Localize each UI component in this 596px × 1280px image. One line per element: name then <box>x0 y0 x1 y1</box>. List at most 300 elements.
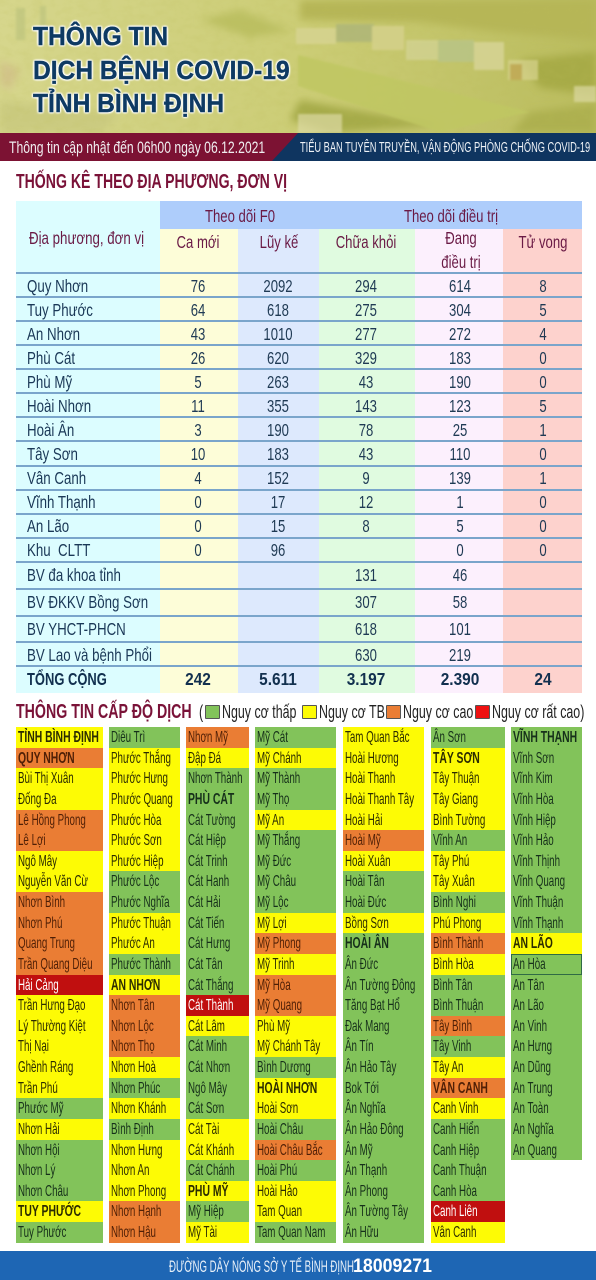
risk list column 6: Tây Vinh <box>433 1038 471 1055</box>
row: An Nhơn <box>27 324 547 344</box>
row: BV ĐKKV Bồng Sơn: 58 <box>453 592 467 612</box>
risk list column 7: VĨNH THẠNH <box>513 729 577 746</box>
row: totals: TỔNG CỘNG <box>27 669 107 689</box>
row: An Lão: 5 <box>456 516 464 536</box>
risk list column 6: TÂY SƠN <box>433 750 480 767</box>
risk list column 5: Ân Đức <box>345 956 378 973</box>
risk list column 5: Ân Nghĩa <box>345 1100 386 1117</box>
risk list column 3: Ngô Mây <box>188 1080 227 1097</box>
risk list column 4: Mỹ Thành <box>257 770 300 787</box>
row: Vân Canh: 9 <box>362 468 370 488</box>
risk list column 6: Tây Thuận <box>433 770 479 787</box>
row: Tây Sơn: 10 <box>191 444 205 464</box>
update date text: Thông tin cập nhật đến 06h00 ngày 06.12.2021 <box>9 138 265 157</box>
row: Khu CLTT: 96 <box>271 540 285 560</box>
risk list column 4: Mỹ Chánh Tây <box>257 1038 320 1055</box>
risk list column 2: Nhơn Hậu <box>111 1224 156 1241</box>
risk list column 5: Ân Mỹ <box>345 1142 373 1158</box>
statistics table <box>16 201 582 693</box>
risk list column 7: Vĩnh Hảo <box>513 832 554 849</box>
risk list column 4: Mỹ Quang <box>257 997 302 1014</box>
risk list column 4: Mỹ Chánh <box>257 750 301 767</box>
risk list column 6: Tây Giang <box>433 791 478 808</box>
title: THÔNG TIN <box>33 21 168 51</box>
row: Vân Canh: 1 <box>539 468 547 488</box>
table header: Lũy kế <box>260 232 298 252</box>
row: BV Lao và bệnh Phổi <box>27 645 471 665</box>
risk list column 5: Hoài Đức <box>345 894 386 911</box>
table header: Theo dõi điều trị <box>404 206 498 226</box>
risk list column 4: Phù Mỹ <box>257 1018 290 1035</box>
risk list column 4: Mỹ An <box>257 812 284 828</box>
row: BV đa khoa tỉnh <box>27 565 467 585</box>
risk list column 3: Cát Thành <box>188 997 233 1014</box>
update info band <box>0 133 596 161</box>
risk list column 5: Hoài Thanh <box>345 770 395 787</box>
row: BV Lao và bệnh Phổi: 630 <box>355 645 377 665</box>
risk list column 2: Nhơn Tân <box>111 997 155 1014</box>
row: Vĩnh Thạnh: 12 <box>359 492 373 512</box>
row: Tuy Phước: 5 <box>539 300 547 320</box>
risk list column 3: Cát Lâm <box>188 1018 225 1035</box>
risk list column 6: Bình Thành <box>433 935 483 952</box>
row: totals: 2.390 <box>441 669 479 689</box>
risk list column 7: Vĩnh Thạnh <box>513 915 563 932</box>
row: An Nhơn: 1010 <box>263 324 293 344</box>
row: Tây Sơn <box>27 444 547 464</box>
risk list column 3: PHÙ CÁT <box>188 791 234 808</box>
risk list column 3: Cát Tiến <box>188 915 224 932</box>
row: BV đa khoa tỉnh: 46 <box>453 565 467 585</box>
risk list column 7: Vĩnh Kim <box>513 770 553 787</box>
heading: epidemic level: THÔNG TIN CẤP ĐỘ DỊCH <box>16 701 192 723</box>
row: Tuy Phước: 64 <box>191 300 205 320</box>
row: Tây Sơn: Tây Sơn <box>27 444 78 464</box>
risk list column 5: Ân Hảo Đông <box>345 1121 404 1138</box>
risk list column 5: Bok Tới <box>345 1080 379 1097</box>
risk list column 7: An Dũng <box>513 1059 551 1076</box>
risk list column 5: Ân Thạnh <box>345 1162 387 1179</box>
risk list column 5: Hoài Xuân <box>345 853 391 870</box>
risk list column 4: Mỹ Trinh <box>257 956 294 973</box>
risk list column 1: Nhơn Châu <box>18 1183 68 1200</box>
row: Hoài Nhơn: 355 <box>267 396 289 416</box>
row: Hoài Nhơn: 123 <box>449 396 471 416</box>
risk list column 5: Ân Hữu <box>345 1224 379 1241</box>
row: BV YHCT-PHCN <box>27 619 471 639</box>
row: Hoài Nhơn: 5 <box>539 396 547 416</box>
risk list column 7: An Tân <box>513 976 544 994</box>
row: Quy Nhơn: 2092 <box>263 276 293 296</box>
risk list column 6: Bình Nghi <box>433 894 476 911</box>
risk list column 2: Phước Hòa <box>111 812 161 828</box>
row: Quy Nhơn: 8 <box>539 276 547 296</box>
risk list column 7: Vĩnh Hòa <box>513 791 554 808</box>
hotline label: ĐƯỜNG DÂY NÓNG SỞ Y TẾ BÌNH ĐỊNH <box>169 1258 354 1276</box>
row: Vĩnh Thạnh <box>27 492 547 512</box>
risk list column 5: Hoài Thanh Tây <box>345 791 414 808</box>
risk list column 3: Đập Đá <box>188 750 221 767</box>
row: Phù Mỹ <box>27 372 547 392</box>
row: Phù Mỹ: 43 <box>359 372 373 392</box>
risk list column 6: Vĩnh An <box>433 832 467 849</box>
row: BV đa khoa tỉnh: BV đa khoa tỉnh <box>27 565 121 585</box>
row: An Lão: 15 <box>271 516 285 536</box>
row: Tuy Phước: 618 <box>267 300 289 320</box>
row: Tuy Phước <box>27 300 547 320</box>
risk list column 7: An Hòa <box>513 956 546 973</box>
row: An Lão: An Lão <box>27 516 69 536</box>
title: TỈNH BÌNH ĐỊNH <box>33 88 224 118</box>
risk list column 2: AN NHƠN <box>111 976 160 994</box>
risk list column 2: Phước Thuận <box>111 915 171 932</box>
risk list column 3: Cát Sơn <box>188 1100 224 1117</box>
row: totals: 24 <box>534 669 552 689</box>
legend: Nguy cơ thấp <box>222 702 296 722</box>
risk list column 5: Tam Quan Bắc <box>345 729 410 746</box>
row: BV đa khoa tỉnh: 131 <box>355 565 377 585</box>
risk list column 6: Tây Xuân <box>433 873 475 890</box>
table header: Đang <box>445 228 477 248</box>
risk list column 1: Trần Phú <box>18 1080 58 1097</box>
row: Tuy Phước: Tuy Phước <box>27 300 93 320</box>
risk list column 4: Mỹ Lợi <box>257 915 287 932</box>
row: Hoài Nhơn: 143 <box>355 396 377 416</box>
risk list column 1 <box>16 727 103 1243</box>
row: Tuy Phước: 275 <box>355 300 377 320</box>
risk list column 1: Ghềnh Ráng <box>18 1059 73 1076</box>
row: Vân Canh: 4 <box>194 468 202 488</box>
row: Tây Sơn: 183 <box>267 444 289 464</box>
risk list column 7: An Quang <box>513 1142 557 1158</box>
risk list column 6: Tây Bình <box>433 1018 472 1035</box>
row: BV Lao và bệnh Phổi: BV Lao và bệnh Phổi <box>27 645 152 665</box>
row: Khu CLTT: 0 <box>539 540 547 560</box>
risk list column 3: Cát Minh <box>188 1038 227 1055</box>
row: Phù Mỹ: 190 <box>449 372 471 392</box>
row: An Lão: 0 <box>539 516 547 536</box>
risk list column 3 <box>186 727 249 1243</box>
risk list column 4: Bình Dương <box>257 1059 311 1076</box>
row: totals <box>27 669 552 689</box>
risk list column 5 <box>343 727 424 1243</box>
risk list column 3: Nhơn Thành <box>188 770 243 787</box>
risk list column 4: Mỹ Phong <box>257 935 301 952</box>
risk list column 7: An Nghĩa <box>513 1121 554 1138</box>
risk list column 5: Hoài Hải <box>345 812 382 828</box>
risk list column 4: Mỹ Đức <box>257 853 291 870</box>
risk list column 3: Cát Khánh <box>188 1142 234 1158</box>
table header: Chữa khỏi <box>336 232 396 252</box>
row: Vân Canh: 152 <box>267 468 289 488</box>
risk list column 6: Canh Hiển <box>433 1121 479 1138</box>
row: Phù Cát: Phù Cát <box>27 348 75 368</box>
risk list column 7 <box>511 727 582 1160</box>
risk list column 3: Cát Hưng <box>188 935 230 952</box>
risk list column 1: Nhơn Bình <box>18 894 65 911</box>
risk list column 1: Lê Hồng Phong <box>18 812 86 828</box>
risk list column 7: Vĩnh Thịnh <box>513 853 560 870</box>
row: Quy Nhơn: 76 <box>191 276 205 296</box>
risk list column 5: HOÀI ÂN <box>345 935 389 952</box>
risk list column 1: Trần Quang Diệu <box>18 956 93 973</box>
risk list column 5: Hoài Hương <box>345 750 399 767</box>
risk list column 2: Diêu Trì <box>111 729 145 746</box>
risk list column 1: Nhơn Hội <box>18 1142 60 1158</box>
row: totals: 5.611 <box>259 669 297 689</box>
risk list column 2: Nhơn Thọ <box>111 1038 155 1055</box>
risk list column 4: Tam Quan Nam <box>257 1224 325 1241</box>
risk list column 2: Bình Định <box>111 1121 154 1138</box>
risk list column 1: Lý Thường Kiệt <box>18 1018 86 1035</box>
row: BV ĐKKV Bồng Sơn: 307 <box>355 592 377 612</box>
risk list column 4: Mỹ Thắng <box>257 832 300 849</box>
row: BV Lao và bệnh Phổi: 219 <box>449 645 471 665</box>
risk list column 2: Nhơn An <box>111 1162 149 1179</box>
row: totals: 3.197 <box>347 669 385 689</box>
row: Vĩnh Thạnh: Vĩnh Thạnh <box>27 492 96 512</box>
table header: điều trị <box>441 252 481 272</box>
header banner with aerial photo <box>0 0 596 133</box>
row: Hoài Nhơn <box>27 396 547 416</box>
risk list column 6: Phú Phong <box>433 915 481 932</box>
row: Tuy Phước: 304 <box>449 300 471 320</box>
table header: Địa phương, đơn vị <box>29 228 144 248</box>
row: An Nhơn: 4 <box>539 324 547 344</box>
risk list column 1: Tuy Phước <box>18 1224 66 1241</box>
title: DỊCH BỆNH COVID-19 <box>33 54 290 84</box>
row: Hoài Ân <box>27 420 547 440</box>
risk list column 1: Bùi Thị Xuân <box>18 770 74 787</box>
risk list column 3: Cát Thắng <box>188 976 233 994</box>
risk list column 2: Nhơn Phúc <box>111 1080 160 1097</box>
row: Quy Nhơn <box>27 276 547 296</box>
row: Phù Cát: 0 <box>539 348 547 368</box>
risk list column 6: VÂN CANH <box>433 1080 488 1097</box>
legend: ( <box>199 702 203 722</box>
risk list column 6: Tây Phú <box>433 853 469 870</box>
risk list column 5: Ân Tường Đông <box>345 976 415 994</box>
risk list column 6: Canh Vinh <box>433 1100 478 1117</box>
row: BV YHCT-PHCN: BV YHCT-PHCN <box>27 619 126 639</box>
row: Hoài Ân: Hoài Ân <box>27 420 74 440</box>
row: Phù Cát: 329 <box>355 348 377 368</box>
risk list column 1: Ngô Mây <box>18 853 57 870</box>
row: An Lão <box>27 516 547 536</box>
row: BV YHCT-PHCN: 618 <box>355 619 377 639</box>
row: Phù Cát: 620 <box>267 348 289 368</box>
row: Vân Canh: Vân Canh <box>27 468 86 488</box>
row: Tây Sơn: 110 <box>450 444 470 464</box>
legend: Nguy cơ rất cao) <box>492 702 584 722</box>
risk list column 3: Cát Hanh <box>188 873 229 890</box>
risk list column 4 <box>255 727 336 1243</box>
row: Khu CLTT: Khu CLTT <box>27 540 90 560</box>
risk list column 7: An Toàn <box>513 1100 549 1117</box>
risk list column 4: Hoài Hảo <box>257 1183 298 1200</box>
row: BV ĐKKV Bồng Sơn <box>27 592 467 612</box>
risk list column 1: Đống Đa <box>18 791 57 808</box>
row: An Lão: 8 <box>362 516 370 536</box>
risk list column 6: Bình Tân <box>433 976 472 994</box>
table header: Tử vong <box>519 232 567 252</box>
risk list column 5: Ân Tín <box>345 1038 374 1055</box>
legend: Nguy cơ cao <box>403 702 473 722</box>
risk list column 3: Cát Trinh <box>188 853 228 870</box>
risk list column 1: Hải Cảng <box>18 976 59 994</box>
risk list column 6: Tây An <box>433 1059 463 1076</box>
risk list column 7: Vĩnh Sơn <box>513 750 554 767</box>
risk list column 5: Hoài Mỹ <box>345 832 381 849</box>
risk list column 5: Ân Phong <box>345 1183 388 1200</box>
risk list column 4: HOÀI NHƠN <box>257 1080 317 1097</box>
risk list column 4: Mỹ Châu <box>257 873 296 890</box>
hotline number: 18009271 <box>353 1255 432 1277</box>
risk list column 7: AN LÃO <box>513 935 553 952</box>
row: Tây Sơn: 43 <box>359 444 373 464</box>
row: Hoài Nhơn: 11 <box>191 396 205 416</box>
risk list column 7: Vĩnh Quang <box>513 873 565 890</box>
row: An Nhơn: 43 <box>191 324 205 344</box>
risk list column 1: Thị Nại <box>18 1038 49 1055</box>
risk list column 3: Mỹ Tài <box>188 1224 217 1241</box>
row: An Nhơn: An Nhơn <box>27 324 80 344</box>
risk list column 7: Vĩnh Hiệp <box>513 812 556 828</box>
footer hotline bar <box>0 1251 596 1280</box>
title <box>31 19 291 119</box>
risk list column 2: Phước An <box>111 935 155 952</box>
risk list column 7: An Vinh <box>513 1018 547 1035</box>
row: Hoài Ân: 190 <box>267 420 289 440</box>
risk list column 6: Canh Thuận <box>433 1162 487 1179</box>
row: Phù Cát: 26 <box>191 348 205 368</box>
risk list column 5: Ân Tường Tây <box>345 1203 408 1220</box>
risk list column 1: Lê Lợi <box>18 832 46 849</box>
row: Khu CLTT: 0 <box>456 540 464 560</box>
row: Phù Mỹ: 5 <box>194 372 202 392</box>
risk list column 5: Đak Mang <box>345 1018 389 1035</box>
risk list column 5: Bồng Sơn <box>345 915 389 932</box>
risk list column 6: Bình Hòa <box>433 956 474 973</box>
risk list column 2: Phước Hiệp <box>111 853 164 870</box>
row: Phù Mỹ: Phù Mỹ <box>27 372 72 392</box>
legend <box>199 702 584 722</box>
row: Hoài Nhơn: Hoài Nhơn <box>27 396 91 416</box>
risk list column 2: Nhơn Khánh <box>111 1100 166 1117</box>
risk list column 4: Mỹ Cát <box>257 729 288 746</box>
risk list column 3: Cát Hải <box>188 894 221 911</box>
risk list column 3: Cát Tân <box>188 956 223 973</box>
risk list column 3: Cát Tường <box>188 812 235 828</box>
row: totals: 242 <box>185 669 211 689</box>
row: Khu CLTT: 0 <box>194 540 202 560</box>
risk list column 7: An Hưng <box>513 1038 552 1055</box>
risk list column 2: Nhơn Hạnh <box>111 1203 161 1220</box>
row: Hoài Ân: 25 <box>453 420 467 440</box>
risk list column 4: Hoài Châu Bắc <box>257 1142 323 1158</box>
risk list column 6: Bình Tường <box>433 812 485 828</box>
risk list column 6: Vân Canh <box>433 1224 476 1241</box>
row: Vân Canh <box>27 468 547 488</box>
risk list column 4: Hoài Châu <box>257 1121 303 1138</box>
risk list column 1: Quang Trung <box>18 935 75 952</box>
row: Hoài Ân: 78 <box>359 420 373 440</box>
row: An Lão: 0 <box>194 516 202 536</box>
table header: Theo dõi F0 <box>205 206 275 226</box>
row: Vĩnh Thạnh: 17 <box>271 492 285 512</box>
risk list column 4: Hoài Sơn <box>257 1100 298 1117</box>
row: Vĩnh Thạnh: 0 <box>194 492 202 512</box>
row: Phù Cát <box>27 348 547 368</box>
risk list column 1: TUY PHƯỚC <box>18 1203 81 1220</box>
risk list column 6: Ân Sơn <box>433 729 466 746</box>
risk list column 5: Ân Hảo Tây <box>345 1059 396 1076</box>
risk list column 7: An Lão <box>513 997 544 1014</box>
row: BV ĐKKV Bồng Sơn: BV ĐKKV Bồng Sơn <box>27 592 148 612</box>
row: Phù Mỹ: 263 <box>267 372 289 392</box>
risk list column 1: Nguyễn Văn Cừ <box>18 873 88 890</box>
row: Quy Nhơn: Quy Nhơn <box>27 276 88 296</box>
risk list column 1: TỈNH BÌNH ĐỊNH <box>18 729 99 746</box>
risk list column 1: Nhơn Phú <box>18 915 62 932</box>
risk list column 4: Tam Quan <box>257 1203 302 1220</box>
risk list column 4: Mỹ Lộc <box>257 894 288 911</box>
risk list column 2: Phước Nghĩa <box>111 894 170 911</box>
row: Vân Canh: 139 <box>449 468 471 488</box>
risk list column 2: Nhơn Phong <box>111 1183 166 1200</box>
risk list column 1: Nhơn Lý <box>18 1162 55 1179</box>
risk list column 2: Phước Hưng <box>111 770 168 787</box>
row: Vĩnh Thạnh: 1 <box>456 492 464 512</box>
risk list column 2: Nhơn Hưng <box>111 1142 162 1158</box>
row: Quy Nhơn: 614 <box>449 276 471 296</box>
risk list column 3: Mỹ Hiệp <box>188 1203 224 1220</box>
row: An Nhơn: 277 <box>355 324 377 344</box>
row: Quy Nhơn: 294 <box>355 276 377 296</box>
risk list column 3: Cát Chánh <box>188 1162 235 1179</box>
row: An Nhơn: 272 <box>449 324 471 344</box>
risk list column 3: Cát Tài <box>188 1121 219 1138</box>
table header <box>29 206 567 272</box>
risk list column 2: Phước Sơn <box>111 832 162 849</box>
risk list column 2: Phước Thắng <box>111 750 171 767</box>
risk list column 2: Phước Thành <box>111 956 171 973</box>
row: Tây Sơn: 0 <box>539 444 547 464</box>
risk list column 5: Hoài Tân <box>345 873 384 890</box>
risk list column 1: Phước Mỹ <box>18 1100 63 1117</box>
risk list column 7: Vĩnh Thuận <box>513 894 563 911</box>
risk list column 7: An Trung <box>513 1080 553 1097</box>
risk list column 2: Phước Lộc <box>111 873 159 890</box>
risk list column 1: QUY NHƠN <box>18 750 75 767</box>
risk list column 3: Cát Hiệp <box>188 832 226 849</box>
row: Hoài Ân: 1 <box>539 420 547 440</box>
heading: statistics by locality: THỐNG KÊ THEO ĐỊA PHƯƠNG, ĐƠN VỊ <box>16 171 287 193</box>
committee text: TIỂU BAN TUYÊN TRUYỀN, VẬN ĐỘNG PHÒNG CHỐNG COVID-19 <box>300 139 590 156</box>
risk list column 4: Mỹ Hòa <box>257 976 291 994</box>
risk list column 2: Nhơn Hoà <box>111 1059 156 1076</box>
risk list column 2: Phước Quang <box>111 791 173 808</box>
risk list column 6: Bình Thuận <box>433 997 483 1014</box>
risk list column 2: Nhơn Lộc <box>111 1018 154 1035</box>
table header: Ca mới <box>177 232 219 252</box>
risk list column 6 <box>431 727 505 1243</box>
row: Phù Mỹ: 0 <box>539 372 547 392</box>
row: BV YHCT-PHCN: 101 <box>449 619 471 639</box>
risk list column 3: Nhơn Mỹ <box>188 729 228 746</box>
risk list column 6: Canh Hiệp <box>433 1142 479 1158</box>
risk list column 3: PHÙ MỸ <box>188 1183 228 1200</box>
